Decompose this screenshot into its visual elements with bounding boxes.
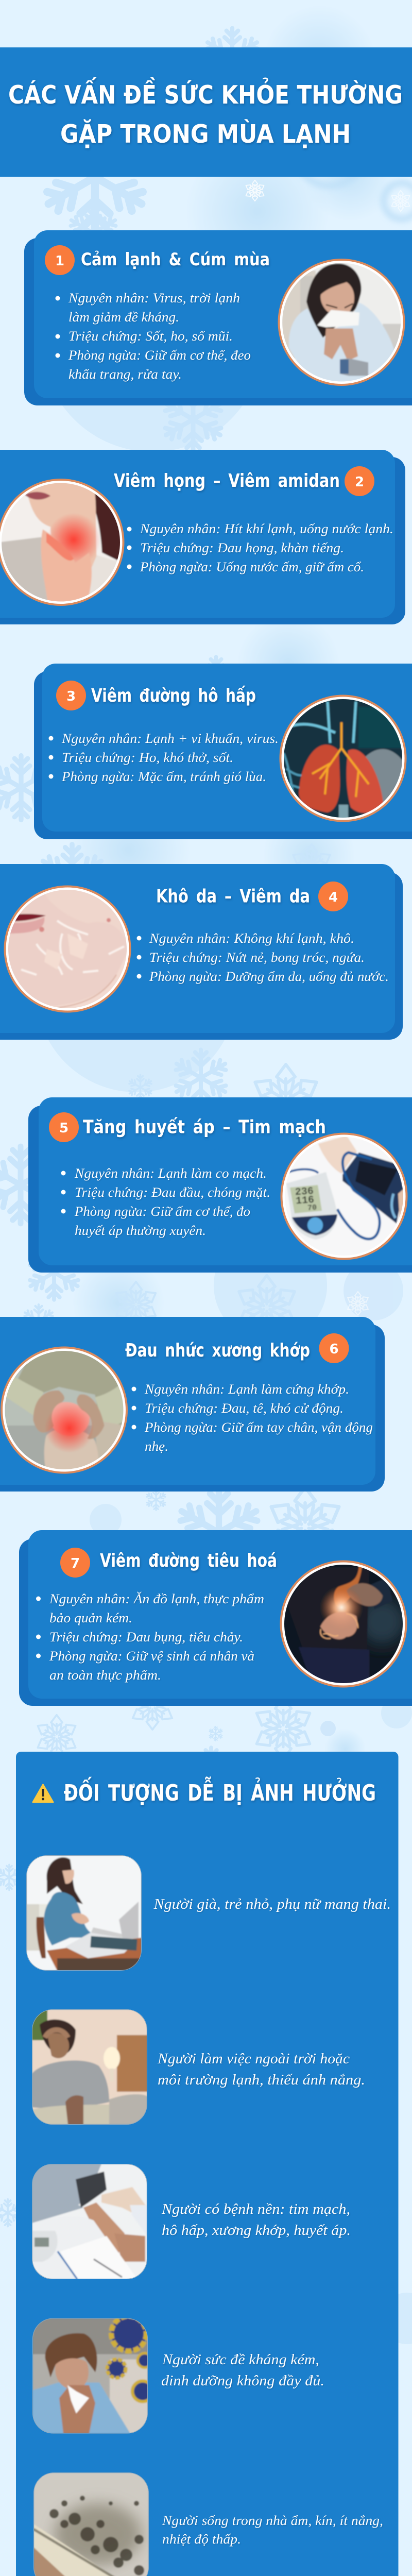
photo: tired man	[32, 2009, 147, 2125]
photo: blood pressure monitor: 116	[295, 1194, 315, 1207]
heading: Viêm đường tiêu hoá	[100, 1550, 277, 1571]
bullet list	[36, 1591, 264, 1683]
heading: Tăng huyết áp – Tim mạch	[83, 1117, 326, 1138]
photo: blood pressure monitor: 70	[307, 1204, 317, 1213]
panel: card 2 sore throat	[0, 450, 405, 624]
bullet list: Nguyên nhân: Lạnh + vi khuẩn, virus.	[61, 731, 279, 746]
number badge 6	[319, 1333, 349, 1363]
bullet list: Phòng ngừa: Uống nước ấm, giữ ấm cổ.	[140, 560, 364, 574]
text: group 5: Người sống trong nhà ẩm, kín, ít nắng,	[162, 2513, 383, 2528]
bullet list: làm giảm đề kháng.	[68, 310, 179, 325]
bullet list: bảo quản kém.	[49, 1611, 132, 1625]
bullet list: Triệu chứng: Nứt nẻ, bong tróc, ngứa.	[149, 950, 365, 965]
panel: card 5 hypertension	[28, 1097, 412, 1273]
text: group 2: môi trường lạnh, thiếu ánh nắng.	[158, 2072, 365, 2088]
title: GẶP TRONG MÙA LẠNH	[60, 118, 351, 149]
heading: Cảm lạnh & Cúm mùa	[81, 249, 270, 270]
heading: Đau nhức xương khớp	[125, 1340, 310, 1361]
panel: card 3 respiratory	[34, 664, 412, 839]
text: group 5	[162, 2513, 383, 2547]
photo: pregnant woman	[26, 1855, 142, 1971]
number badge 7	[60, 1548, 90, 1578]
number badge 4	[318, 882, 348, 911]
bullet list: Triệu chứng: Đau, tê, khó cử động.	[145, 1401, 344, 1416]
panel: card 4 dry skin	[0, 864, 403, 1040]
icon: warning	[33, 1785, 53, 1802]
text: group 2	[157, 2050, 365, 2088]
title band	[0, 47, 412, 177]
heading: Khô da – Viêm da	[156, 886, 310, 907]
panel: card 1 cold and flu	[24, 230, 412, 405]
photo: knee pain	[1, 1347, 128, 1473]
photo: stomach ache	[280, 1560, 407, 1688]
number badge 1	[45, 245, 75, 275]
bullet list: Nguyên nhân: Hít khí lạnh, uống nước lạnh.	[140, 521, 393, 536]
text: group 3: Người có bệnh nền: tim mạch,	[161, 2201, 350, 2217]
number badge 3: 3	[66, 689, 76, 704]
number badge 5	[49, 1112, 79, 1142]
number badge 3	[56, 681, 86, 710]
photo: moldy wall	[33, 2472, 149, 2576]
bullet list	[137, 931, 389, 984]
bullet list: Triệu chứng: Sốt, ho, sổ mũi.	[68, 329, 233, 344]
text: group 1: Người già, trẻ nhỏ, phụ nữ mang thai.	[153, 1896, 391, 1912]
bullet list: Triệu chứng: Đau bụng, tiêu chảy.	[49, 1630, 243, 1645]
photo: woman sneezing	[278, 259, 405, 386]
heading: Viêm đường hô hấp	[91, 685, 256, 706]
text: group 4: dinh dưỡng không đầy đủ.	[161, 2372, 324, 2389]
title	[8, 76, 403, 149]
bullet list	[127, 521, 393, 574]
bullet list	[48, 731, 279, 784]
bullet list: Nguyên nhân: Lạnh làm cứng khớp.	[144, 1382, 349, 1397]
photo: sneezing man with viruses	[32, 2316, 153, 2434]
panel: vulnerable groups	[16, 1752, 399, 2576]
bullet list: Nguyên nhân: Virus, trời lạnh	[68, 291, 240, 306]
text: group 2: Người làm việc ngoài trời hoặc	[157, 2050, 350, 2067]
bullet list: nhẹ.	[145, 1439, 168, 1454]
bullet list	[56, 291, 251, 382]
text: group 4: Người sức đề kháng kém,	[162, 2351, 319, 2368]
bullet list: Phòng ngừa: Giữ ấm cơ thể, đeo	[68, 348, 251, 363]
bullet list: Nguyên nhân: Ăn đồ lạnh, thực phẩm	[49, 1591, 264, 1606]
bullet list: Phòng ngừa: Giữ ấm cơ thể, đo	[74, 1204, 250, 1219]
number badge 5: 5	[59, 1121, 68, 1136]
bullet list	[61, 1166, 270, 1238]
text: group 3: hô hấp, xương khớp, huyết áp.	[162, 2222, 351, 2239]
heading: Viêm họng – Viêm amidan	[114, 470, 340, 492]
text: group 4	[161, 2351, 324, 2389]
photo: sore throat	[0, 479, 125, 606]
text: group 3	[161, 2201, 351, 2239]
bullet list: Phòng ngừa: Giữ vệ sinh cá nhân và	[49, 1649, 254, 1664]
bullet list: Triệu chứng: Đau họng, khàn tiếng.	[140, 540, 344, 555]
photo: blood pressure check	[32, 2164, 147, 2279]
bullet list: Phòng ngừa: Mặc ấm, tránh gió lùa.	[61, 769, 266, 784]
photo: lungs	[279, 694, 407, 822]
bullet list: Phòng ngừa: Giữ ấm tay chân, vận động	[144, 1420, 373, 1435]
number badge 2: 2	[355, 474, 364, 490]
bullet list: huyết áp thường xuyên.	[75, 1223, 206, 1238]
bullet list: Phòng ngừa: Dưỡng ẩm da, uống đủ nước.	[149, 969, 389, 984]
number badge 7: 7	[71, 1556, 80, 1571]
bullet list: Nguyên nhân: Không khí lạnh, khô.	[149, 931, 354, 946]
panel: card 6 joint pain	[0, 1317, 385, 1492]
bullet list: Nguyên nhân: Lạnh làm co mạch.	[74, 1166, 267, 1181]
text: group 5: nhiệt độ thấp.	[162, 2532, 241, 2547]
bullet list: khẩu trang, rửa tay.	[68, 367, 182, 382]
number badge 1: 1	[55, 253, 64, 269]
number badge 6: 6	[329, 1342, 339, 1357]
number badge 2	[345, 466, 374, 496]
number badge 4: 4	[329, 890, 338, 905]
photo: blood pressure monitor	[280, 1132, 408, 1260]
bullet list	[132, 1382, 373, 1454]
panel: card 7 digestive	[19, 1530, 412, 1706]
bullet list: Triệu chứng: Đau đầu, chóng mặt.	[75, 1185, 270, 1200]
bullet list: an toàn thực phẩm.	[49, 1668, 161, 1683]
bullet list: Triệu chứng: Ho, khó thở, sốt.	[62, 750, 233, 765]
photo: blood pressure monitor: 236	[295, 1185, 314, 1198]
photo: dry skin	[4, 885, 131, 1013]
